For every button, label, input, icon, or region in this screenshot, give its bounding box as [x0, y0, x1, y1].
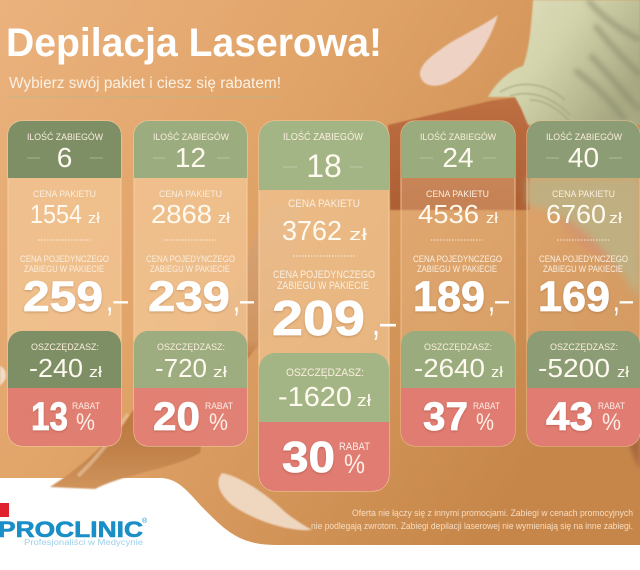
card: 24 treatments: 189 — [413, 273, 485, 321]
card: 18 treatments: 3762 — [282, 215, 342, 246]
card: 12 treatments: zł — [213, 364, 228, 381]
card: 6 treatments: RABAT — [72, 401, 100, 412]
card: 12 treatments: -720 — [155, 353, 207, 383]
card: 18 treatments: RABAT — [339, 441, 370, 453]
card: 18 treatments: 18 — [306, 148, 342, 184]
card: 18 treatments: ,– — [372, 301, 396, 344]
card: 40 treatments: % — [602, 409, 621, 436]
card: 24 treatments: zł — [486, 210, 499, 227]
card: 40 treatments: ILOŚĆ ZABIEGÓW — [546, 131, 622, 143]
title: Depilacja Laserowa! — [6, 21, 382, 65]
card: 24 treatments: -2640 — [414, 353, 485, 383]
card: 40 treatments: 6760 — [546, 199, 606, 229]
card: 18 treatments: ILOŚĆ ZABIEGÓW — [283, 130, 364, 143]
card: 24 treatments: CENA PAKIETU — [426, 189, 489, 200]
card: 12 treatments: OSZCZĘDZASZ: — [157, 342, 225, 353]
card: 40 treatments: zł — [617, 364, 630, 381]
card: 12 treatments: % — [209, 409, 228, 436]
card: 24 treatments: RABAT — [473, 401, 500, 412]
card: 6 treatments: 13 — [31, 395, 68, 439]
feather: bottom — [218, 473, 312, 530]
card: 40 treatments: -5200 — [538, 353, 610, 383]
card: 24 treatments: ILOŚĆ ZABIEGÓW — [420, 131, 496, 143]
card: 6 treatments: ZABIEGU W PAKIECIE — [24, 264, 104, 275]
disclaimer — [311, 508, 633, 532]
logo: Proclinic — [0, 503, 148, 547]
card: 18 treatments: CENA PAKIETU — [288, 198, 360, 210]
card: 12 treatments: 2868 — [151, 199, 212, 229]
card: 40 treatments: 40 — [568, 142, 599, 173]
card: 6 treatments: 259 — [23, 273, 103, 321]
card: 12 treatments: ZABIEGU W PAKIECIE — [150, 264, 230, 275]
card: 18 treatments — [259, 121, 396, 491]
card: 6 treatments: CENA POJEDYNCZEGO — [20, 254, 109, 265]
card: 6 treatments: ILOŚĆ ZABIEGÓW — [27, 131, 103, 143]
card: 40 treatments: RABAT — [598, 401, 625, 412]
card: 12 treatments: 20 — [153, 395, 200, 439]
card: 12 treatments: RABAT — [205, 401, 233, 412]
card: 6 treatments: 1554 — [30, 199, 82, 229]
card: 24 treatments: 4536 — [418, 199, 479, 229]
card: 24 treatments: % — [476, 409, 494, 436]
card: 12 treatments: CENA POJEDYNCZEGO — [146, 254, 235, 265]
card: 24 treatments: ZABIEGU W PAKIECIE — [417, 264, 497, 275]
card: 18 treatments: CENA POJEDYNCZEGO — [273, 269, 375, 281]
card: 12 treatments — [134, 121, 254, 446]
card: 6 treatments: zł — [89, 364, 103, 381]
photo: leg and foot — [50, 205, 300, 489]
card: 6 treatments — [8, 121, 128, 446]
logo: Proclinic: Profesjonaliści w Medycynie — [24, 538, 144, 547]
card: 40 treatments — [527, 121, 640, 446]
subtitle: Wybierz swój pakiet i ciesz się rabatem! — [9, 75, 281, 92]
card: 6 treatments: % — [76, 409, 95, 436]
card: 6 treatments: 6 — [57, 142, 72, 173]
card: 18 treatments: zł — [357, 391, 371, 410]
card: 40 treatments: 169 — [538, 273, 610, 321]
card: 24 treatments: CENA POJEDYNCZEGO — [413, 254, 502, 265]
card: 12 treatments: 12 — [175, 142, 206, 173]
card: 18 treatments: % — [344, 449, 365, 479]
card: 18 treatments: 209 — [272, 292, 365, 346]
logo: Proclinic: PROCLINIC — [0, 517, 143, 542]
card: 40 treatments: 43 — [546, 395, 593, 439]
photo: body and towel — [388, 0, 640, 470]
card: 12 treatments: ,– — [233, 281, 254, 319]
card: 12 treatments: 239 — [148, 273, 230, 321]
card: 6 treatments: OSZCZĘDZASZ: — [31, 342, 99, 353]
card: 24 treatments: OSZCZĘDZASZ: — [424, 342, 492, 353]
card: 24 treatments: 37 — [423, 395, 468, 439]
card: 18 treatments: 30 — [282, 433, 335, 482]
card: 6 treatments: -240 — [29, 353, 83, 383]
card: 12 treatments: zł — [218, 210, 231, 227]
card: 18 treatments: ZABIEGU W PAKIECIE — [277, 280, 369, 292]
feather: left edge — [0, 366, 6, 386]
card: 24 treatments: zł — [491, 364, 504, 381]
card: 40 treatments: CENA PAKIETU — [552, 189, 615, 200]
card: 12 treatments: CENA PAKIETU — [159, 189, 222, 200]
feather: top — [420, 15, 498, 86]
card: 12 treatments: ILOŚĆ ZABIEGÓW — [153, 131, 229, 143]
card: 18 treatments: -1620 — [278, 381, 352, 412]
card: 40 treatments: OSZCZĘDZASZ: — [550, 342, 618, 353]
logo: Proclinic: ® — [142, 517, 148, 525]
card: 40 treatments: zł — [609, 210, 623, 227]
card: 6 treatments: CENA PAKIETU — [33, 189, 96, 200]
card: 18 treatments: OSZCZĘDZASZ: — [286, 367, 364, 379]
card: 24 treatments — [401, 121, 515, 446]
card: 18 treatments: zł — [349, 225, 367, 244]
card: 24 treatments: 24 — [442, 142, 474, 173]
card: 24 treatments: ,– — [488, 281, 509, 319]
card: 6 treatments: ,– — [106, 281, 128, 319]
card: 6 treatments: zł — [88, 210, 101, 227]
card: 40 treatments: ZABIEGU W PAKIECIE — [543, 264, 623, 275]
